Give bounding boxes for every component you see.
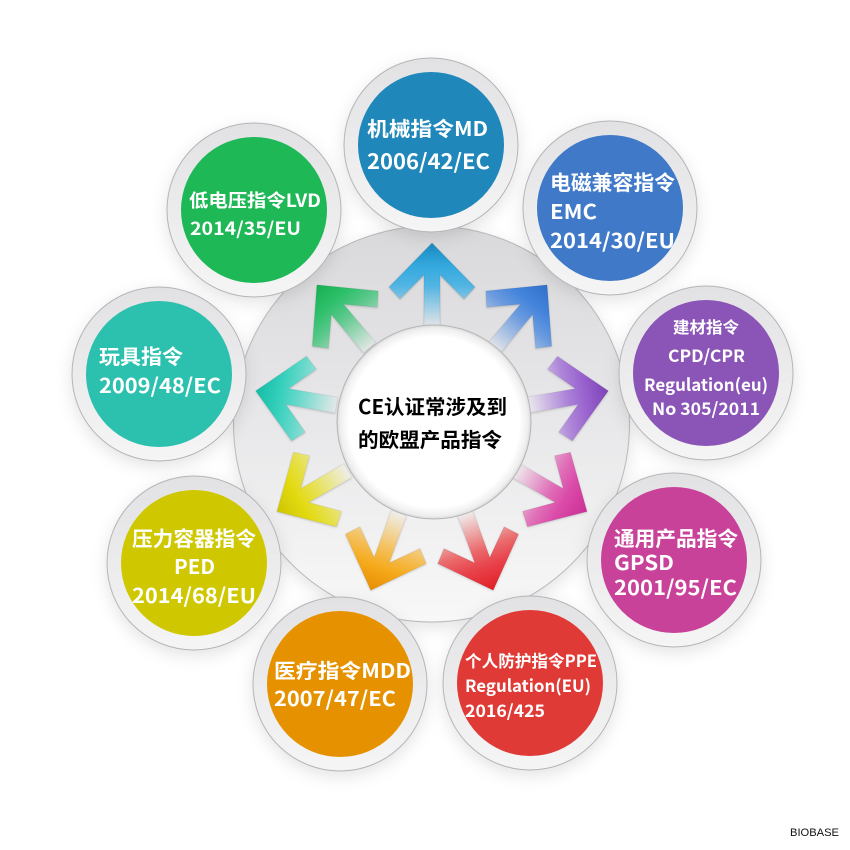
circle: construction products <box>619 286 793 460</box>
arrow: low voltage <box>284 257 403 375</box>
circle: personal protective equipment: 2016/425 <box>465 697 545 722</box>
circle: general product safety: 通用产品指令 <box>614 522 739 552</box>
circle: construction products: No 305/2011 <box>652 395 760 420</box>
circle: personal protective equipment <box>443 596 617 770</box>
circle: construction products: 建材指令 <box>673 314 739 338</box>
circle: medical devices: 医疗指令MDD <box>274 655 411 684</box>
centre title: CE认证常涉及到 <box>358 391 507 420</box>
circle: pressure equipment: PED <box>174 550 215 580</box>
circle: general product safety: 2001/95/EC <box>614 571 737 601</box>
arrow: general product <box>495 433 609 549</box>
circle: pressure equipment: 压力容器指令 <box>132 522 257 552</box>
circle: toy safety: 2009/48/EC <box>99 369 221 399</box>
circle: low voltage: 2014/35/EU <box>190 215 301 241</box>
circle: personal protective equipment: Regulation(EU) <box>465 672 591 697</box>
centre title: 的欧盟产品指令 <box>358 424 502 453</box>
circle: pressure equipment: 2014/68/EU <box>132 579 256 609</box>
arrow: toys <box>248 349 344 448</box>
arrow: machinery <box>389 243 475 325</box>
circle: toy safety: 玩具指令 <box>99 340 184 370</box>
circle: machinery directive: 2006/42/EC <box>367 146 490 176</box>
circle: EMC directive: 电磁兼容指令 <box>550 166 676 196</box>
circle: pressure equipment <box>107 476 281 650</box>
circle: personal protective equipment: 个人防护指令PPE <box>465 648 597 672</box>
arrow: construction <box>520 349 616 448</box>
watermark: BIOBASE <box>790 827 839 839</box>
circle: medical devices <box>253 597 427 771</box>
circle: general product safety <box>587 473 761 647</box>
centre title <box>358 391 507 453</box>
circle: EMC directive: 2014/30/EU <box>550 224 675 254</box>
circle: low voltage: 低电压指令LVD <box>189 187 321 213</box>
circle: EMC directive: EMC <box>550 195 597 225</box>
circle: machinery directive: 机械指令MD <box>367 113 488 142</box>
circle: construction products: Regulation(eu) <box>644 371 768 396</box>
circle: construction products: CPD/CPR <box>668 342 745 367</box>
circle: EMC directive <box>523 121 697 295</box>
arrow: medical <box>330 498 439 605</box>
circle: toy safety <box>72 287 246 461</box>
circle: medical devices: 2007/47/EC <box>274 682 396 712</box>
large grey background disc <box>234 226 630 622</box>
circle: low voltage <box>167 123 341 297</box>
ring of nine arrows <box>248 243 616 605</box>
arrow: electromagnetic <box>461 257 580 375</box>
circle: general product safety: GPSD <box>614 546 674 576</box>
circle: machinery directive <box>344 58 518 232</box>
arrow: pressure <box>255 433 369 549</box>
centre hub <box>337 325 531 519</box>
arrow: protective equipment <box>425 498 534 605</box>
